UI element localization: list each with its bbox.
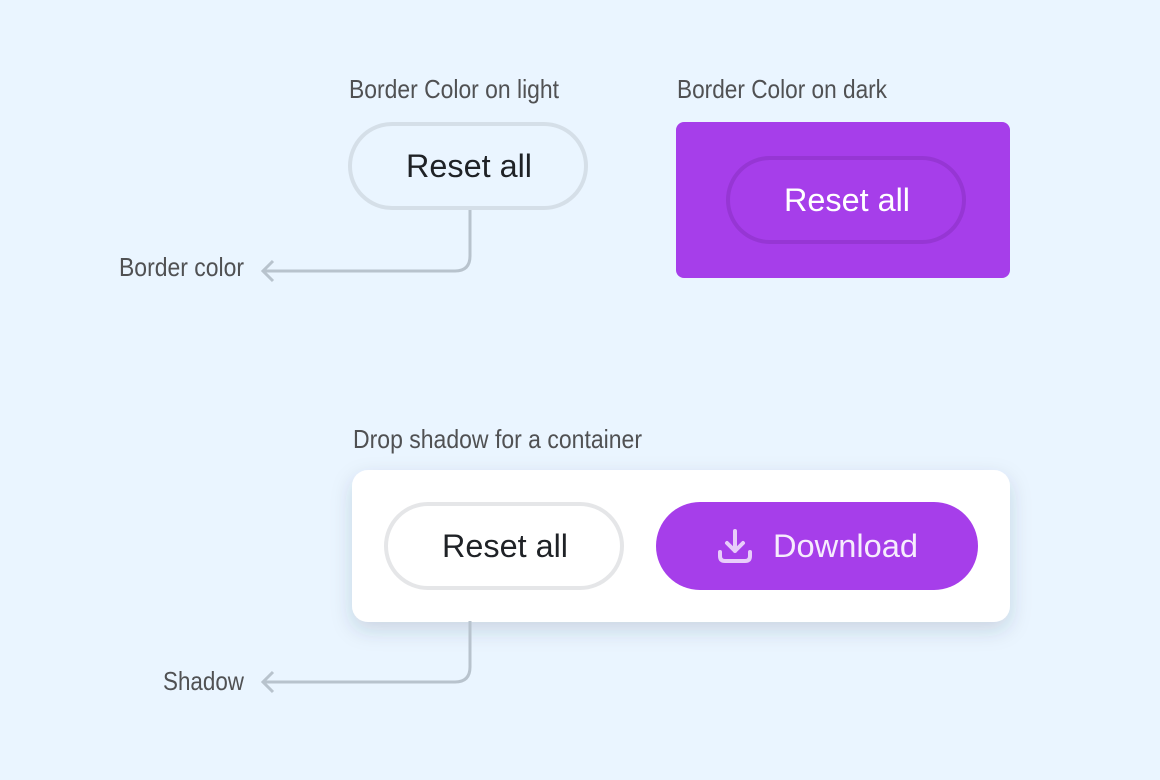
label: shadow: Shadow xyxy=(163,666,244,696)
button: reset all on white xyxy=(386,504,622,588)
arrow: shadow callout xyxy=(263,621,470,692)
button: download: Download xyxy=(773,528,918,564)
button: download xyxy=(656,502,978,590)
icon: download xyxy=(720,531,750,561)
panel: dark background xyxy=(676,122,1010,278)
heading: border color on light: Border Color on light xyxy=(349,74,560,104)
button: reset all on white: Reset all xyxy=(442,528,568,564)
heading: drop shadow for a container: Drop shadow for a container xyxy=(353,424,642,454)
heading: border color on dark: Border Color on dark xyxy=(677,74,888,104)
panel: white container with shadow xyxy=(352,470,1010,622)
button: reset all on light: Reset all xyxy=(406,148,532,184)
button: reset all on dark: Reset all xyxy=(784,182,910,218)
button: reset all on dark xyxy=(728,158,964,242)
button: reset all on light xyxy=(350,124,586,208)
label: border color: Border color xyxy=(119,252,244,282)
arrow: border color callout xyxy=(263,210,470,281)
